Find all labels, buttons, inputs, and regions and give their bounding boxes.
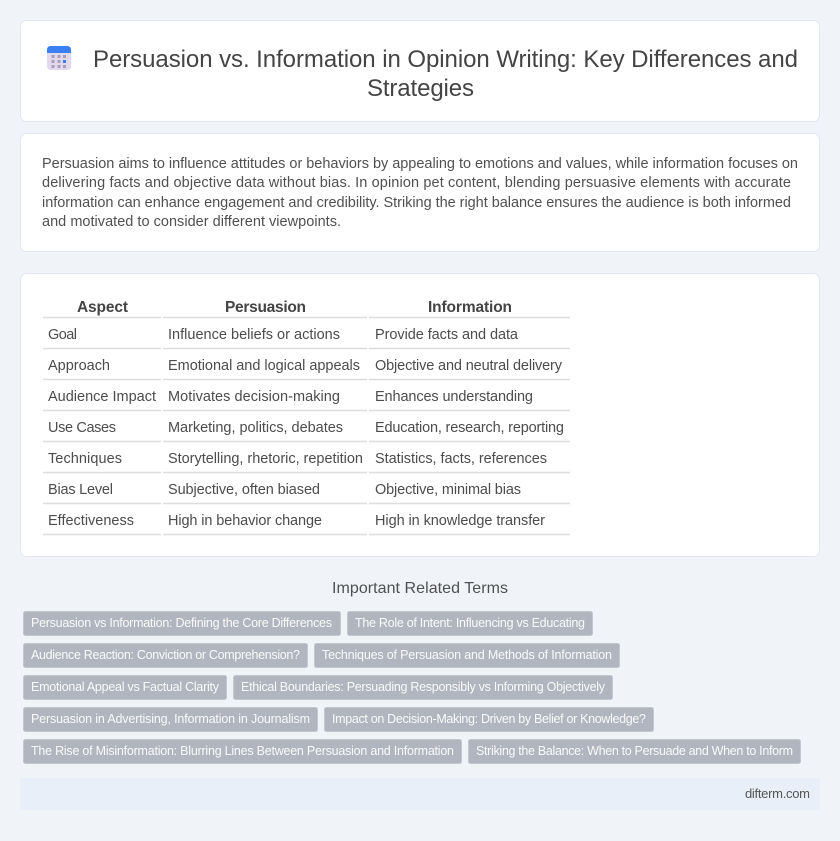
- text block: introduction paragraph: [42, 156, 798, 230]
- text block: introduction paragraph: information can enhance engagement and credibility. Striking the right balance ensures the audience is both informed: [42, 195, 791, 211]
- tag: audience reaction: [24, 644, 308, 668]
- text block: introduction paragraph: and motivated to consider different viewpoints.: [42, 214, 341, 230]
- table row: use cases: Use Cases: [48, 420, 116, 436]
- icon: calendar: [47, 46, 71, 70]
- table row: effectiveness: Effectiveness: [48, 513, 134, 529]
- table row: approach: Objective and neutral delivery: [375, 358, 563, 374]
- panel: title header: [20, 20, 820, 122]
- table row: audience impact: Motivates decision-making: [168, 389, 340, 405]
- tag: emotional appeal: Emotional Appeal vs Factual Clarity: [31, 680, 220, 694]
- tag: striking the balance: [468, 740, 800, 764]
- panel: introduction: [20, 134, 820, 252]
- tag: advertising and journalism: Persuasion in Advertising, Information in Journalism: [31, 712, 310, 726]
- tag: core differences: [24, 612, 340, 636]
- title: [93, 46, 798, 102]
- title: Persuasion vs. Information in Opinion Writing: Key Differences and: [93, 46, 798, 73]
- table row: effectiveness: High in knowledge transfer: [375, 513, 545, 529]
- table row: use cases: [43, 420, 570, 442]
- table row: bias level: [43, 482, 570, 504]
- tag: decision-making: Impact on Decision-Making: Driven by Belief or Knowledge?: [332, 712, 646, 726]
- footer: [20, 778, 820, 810]
- table row: techniques: Storytelling, rhetoric, repetition: [168, 451, 363, 467]
- table header: [43, 299, 570, 318]
- table row: techniques: Techniques: [48, 451, 122, 467]
- table row: goal: [43, 327, 570, 348]
- tag: striking the balance: Striking the Balance: When to Persuade and When to Inform: [476, 744, 793, 758]
- table row: effectiveness: High in behavior change: [168, 513, 322, 529]
- text block: introduction paragraph: Persuasion aims to influence attitudes or behaviors by appealing to emotions and values, while information focuses on: [42, 156, 798, 172]
- table row: use cases: Education, research, reporting: [375, 420, 564, 436]
- table row: goal: Provide facts and data: [375, 327, 519, 343]
- panel: comparison table: [20, 274, 820, 556]
- tag: core differences: Persuasion vs Information: Defining the Core Differences: [31, 616, 332, 630]
- table row: effectiveness: [43, 513, 570, 534]
- table row: bias level: Objective, minimal bias: [375, 482, 521, 498]
- tag: ethical boundaries: [234, 676, 612, 700]
- tag: decision-making: [324, 708, 654, 732]
- table row: approach: Approach: [48, 358, 110, 374]
- table header: Persuasion: [225, 299, 306, 316]
- tag: misinformation: [24, 740, 462, 764]
- footer: difterm.com: [745, 786, 810, 801]
- table row: audience impact: Audience Impact: [48, 389, 156, 405]
- table row: bias level: Bias Level: [48, 482, 113, 498]
- tag: role of intent: The Role of Intent: Influencing vs Educating: [355, 616, 585, 630]
- tag: emotional appeal: [24, 676, 226, 700]
- heading: important related terms: Important Related Terms: [332, 580, 508, 597]
- tag: role of intent: [348, 612, 592, 636]
- table row: techniques: Statistics, facts, references: [375, 451, 547, 467]
- table header: Aspect: [77, 299, 128, 316]
- table row: approach: [43, 358, 570, 380]
- tag: advertising and journalism: [24, 708, 318, 732]
- text block: introduction paragraph: delivering facts and objective data without bias. In opinion pet content, blending persuasive elements with accurate: [42, 175, 791, 191]
- table row: use cases: Marketing, politics, debates: [168, 420, 343, 436]
- table row: audience impact: [43, 389, 570, 410]
- table row: techniques: [43, 451, 570, 472]
- tag: techniques: [314, 644, 620, 668]
- table header: Information: [428, 299, 512, 316]
- table row: audience impact: Enhances understanding: [375, 389, 533, 405]
- related terms tags: [24, 612, 800, 764]
- tag: ethical boundaries: Ethical Boundaries: Persuading Responsibly vs Informing Objectively: [241, 680, 606, 694]
- table row: bias level: Subjective, often biased: [168, 482, 320, 498]
- table row: goal: Influence beliefs or actions: [168, 327, 340, 343]
- tag: techniques: Techniques of Persuasion and Methods of Information: [322, 648, 612, 662]
- table row: approach: Emotional and logical appeals: [168, 358, 360, 374]
- table row: goal: Goal: [48, 327, 77, 343]
- tag: misinformation: The Rise of Misinformation: Blurring Lines Between Persuasion and Information: [31, 744, 454, 758]
- title: Strategies: [367, 75, 474, 102]
- tag: audience reaction: Audience Reaction: Conviction or Comprehension?: [31, 648, 300, 662]
